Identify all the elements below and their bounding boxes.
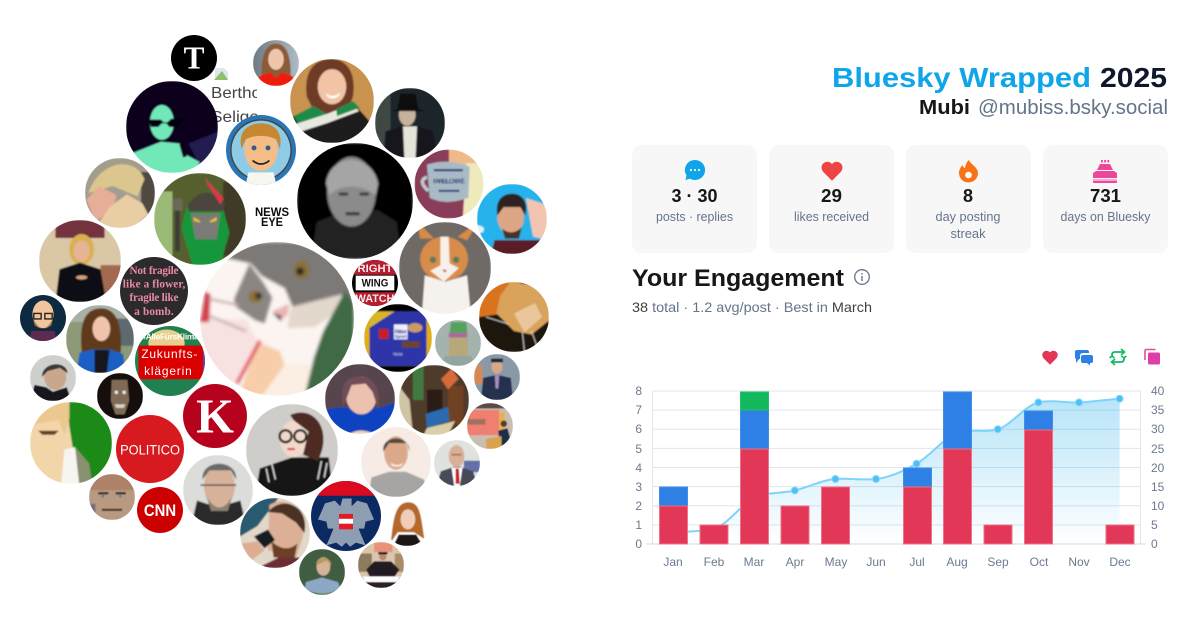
panel: days on Bluesky: days on Bluesky (1060, 209, 1151, 224)
icon: quotes (1145, 350, 1160, 364)
month labels: Oct (1030, 555, 1049, 569)
avatar: woman in red (253, 40, 299, 86)
user name and handle: @mubiss.bsky.social (978, 97, 1168, 119)
broken image placeholder (212, 68, 257, 122)
avatar: man with sky (470, 184, 547, 254)
right axis labels: 5 (1151, 518, 1158, 532)
avatar: not fragile quote: a bomb. (134, 306, 174, 318)
avatar: POLITICO logo (116, 415, 184, 483)
avatar: laughing woman (290, 59, 374, 143)
avatar: Kurier K logo (183, 384, 247, 448)
left axis labels: 0 (635, 537, 642, 551)
right axis labels: 10 (1151, 499, 1165, 513)
right axis labels: 30 (1151, 422, 1165, 436)
cumulative points (791, 395, 1123, 494)
icon: likes (1043, 351, 1057, 364)
avatar: CNN logo (137, 487, 183, 533)
panel: likes received: likes received (794, 209, 869, 224)
avatar: NYT: T (184, 41, 205, 76)
avatar: bald man frowning (89, 474, 135, 520)
avatar: man in suit and cap (474, 354, 520, 400)
avatar: Right Wing Watch: RIGHT (358, 263, 393, 275)
icon: reposts (1110, 349, 1126, 365)
avatar: News Eye logo (255, 207, 289, 229)
left axis labels: 4 (635, 461, 642, 475)
left axis labels: 2 (635, 499, 642, 513)
left axis labels: 6 (635, 422, 642, 436)
avatar: cartoon bearded man (20, 295, 66, 341)
avatar: man in green grass (30, 402, 112, 484)
month labels: Jul (909, 555, 925, 569)
avatar: orange and white cat (399, 222, 491, 314)
avatar: not fragile quote (120, 257, 188, 325)
avatar: POLITICO logo: POLITICO (120, 442, 180, 458)
panel: posts and replies: posts · replies (656, 209, 733, 224)
left axis labels: 7 (635, 403, 642, 417)
avatar: Zukunftsklägerin badge: #AlleFürsKlima (141, 331, 199, 341)
chart legend icons (1043, 349, 1160, 366)
left axis labels (635, 384, 642, 551)
panel: days on Bluesky: 731 (1090, 186, 1121, 206)
stacked bars: likes (660, 430, 1134, 544)
left axis labels: 1 (635, 518, 642, 532)
avatar: not fragile quote: Not fragile (130, 265, 178, 277)
icon: heart (822, 162, 842, 180)
avatar: Ritter Sport: Nuss (393, 352, 403, 357)
avatar: coffee mug (414, 150, 484, 218)
avatar: man with glasses (183, 455, 253, 525)
avatar: not fragile quote: like a flower, (123, 279, 185, 291)
avatar: Austrian eagle (311, 481, 381, 551)
panel: days on Bluesky (1043, 145, 1168, 253)
month labels (663, 555, 1131, 569)
avatar: Zukunftsklägerin badge: klägerin (144, 364, 192, 378)
avatar: Kurier K logo: K (196, 390, 234, 444)
avatar: man drinking coffee (240, 498, 310, 568)
avatar: wooden mask (97, 373, 143, 419)
avatar cloud (20, 35, 549, 595)
combo chart: monthly engagement (635, 384, 1165, 569)
avatar: not fragile quote: fragile like (130, 292, 178, 304)
panel: day posting streak: streak (950, 226, 986, 241)
avatar: red-haired illustration (384, 500, 430, 546)
cumulative line (673, 399, 1120, 532)
icon: birthday cake (1093, 160, 1117, 183)
broken image placeholder: Bertho (211, 85, 261, 102)
panel: posts and replies (632, 145, 757, 253)
left axis labels: 5 (635, 442, 642, 456)
month labels: Jan (663, 555, 683, 569)
avatar: Right Wing Watch: WATCH (356, 293, 394, 305)
avatar: NYT (171, 35, 217, 81)
right axis labels: 35 (1151, 403, 1165, 417)
panel: likes received: 29 (821, 186, 842, 206)
right axis labels: 0 (1151, 537, 1158, 551)
avatar: green tiki (154, 173, 246, 265)
user name and handle: Mubi (919, 97, 970, 119)
icon: info (855, 270, 869, 284)
panel: day posting streak: 8 (963, 186, 973, 206)
month labels: Dec (1109, 555, 1131, 569)
avatar: man with dark hair (30, 355, 76, 401)
avatar: green duotone woman (126, 81, 218, 173)
avatar: beer bottles (399, 365, 469, 435)
avatar: man in hat (375, 88, 445, 158)
chart grid (646, 391, 1146, 544)
avatar: blond man outdoors (299, 549, 345, 595)
avatar: curly-haired woman (66, 305, 134, 373)
avatar: cartoon boy (226, 114, 296, 185)
avatar: bald man black and white (297, 143, 413, 259)
month labels: Mar (744, 555, 764, 569)
month labels: Sep (987, 555, 1009, 569)
avatar: News Eye logo: EYE (261, 217, 283, 229)
title: 2025 (1100, 62, 1167, 93)
right axis labels: 15 (1151, 480, 1165, 494)
avatar: blonde with cat (85, 158, 155, 228)
avatar: Right Wing Watch: WING (362, 278, 388, 290)
avatar: Ritter Sport (364, 304, 432, 372)
month labels: May (825, 555, 847, 569)
heading: your engagement: Your Engagement (632, 265, 844, 292)
broken image placeholder: Selige (211, 109, 259, 126)
left axis labels: 3 (635, 480, 642, 494)
avatar: woman with black glasses (246, 404, 338, 496)
panel: likes received (769, 145, 894, 253)
month labels: Jun (866, 555, 886, 569)
month labels: Nov (1068, 555, 1090, 569)
avatar: Right Wing Watch (352, 260, 398, 306)
right axis labels: 25 (1151, 442, 1165, 456)
month labels: Feb (704, 555, 725, 569)
right axis labels (1151, 384, 1165, 551)
panel: day posting streak: day posting (936, 209, 1000, 224)
icon: chat bubble (685, 160, 705, 180)
avatar: presentation speaker (467, 403, 513, 449)
title: Bluesky Wrapped (832, 62, 1091, 93)
panel: day posting streak (906, 145, 1031, 253)
cumulative area (673, 399, 1120, 544)
avatar: coffee mug: FARE IL CAFFÈ (433, 176, 465, 185)
engagement summary: 38 total · 1.2 avg/post · Best in March (632, 299, 872, 315)
left axis labels: 8 (635, 384, 642, 398)
avatar: Zukunftsklägerin badge (135, 326, 205, 396)
avatar: Ritter Sport: Ritter (395, 329, 408, 335)
right axis labels: 20 (1151, 461, 1165, 475)
avatar: masked figure (435, 320, 481, 366)
month labels: Aug (946, 555, 968, 569)
right axis labels: 40 (1151, 384, 1165, 398)
icon: replies (1075, 350, 1093, 366)
avatar: woman in black (39, 220, 121, 302)
month labels: Apr (786, 555, 804, 569)
avatar: News Eye logo: NEWS (255, 207, 289, 219)
avatar: woman in blue (325, 364, 395, 434)
avatar: smiling man in hoodie (361, 427, 431, 497)
avatar: Zukunftsklägerin badge: Zukunfts- (141, 347, 197, 361)
avatar: orange cat close-up (479, 282, 549, 352)
avatar: Ritter Sport: Sport (395, 334, 407, 340)
avatar: bald man in suit (434, 440, 480, 486)
avatar: chef at table (358, 542, 404, 588)
stacked bars: replies and reposts (660, 392, 1052, 506)
panel: posts and replies: 3 · 30 (672, 186, 718, 206)
avatar: CNN logo: CNN (144, 501, 176, 520)
icon: flame (959, 160, 978, 182)
avatar: big grey and white cat (200, 242, 354, 396)
title (832, 62, 1167, 93)
